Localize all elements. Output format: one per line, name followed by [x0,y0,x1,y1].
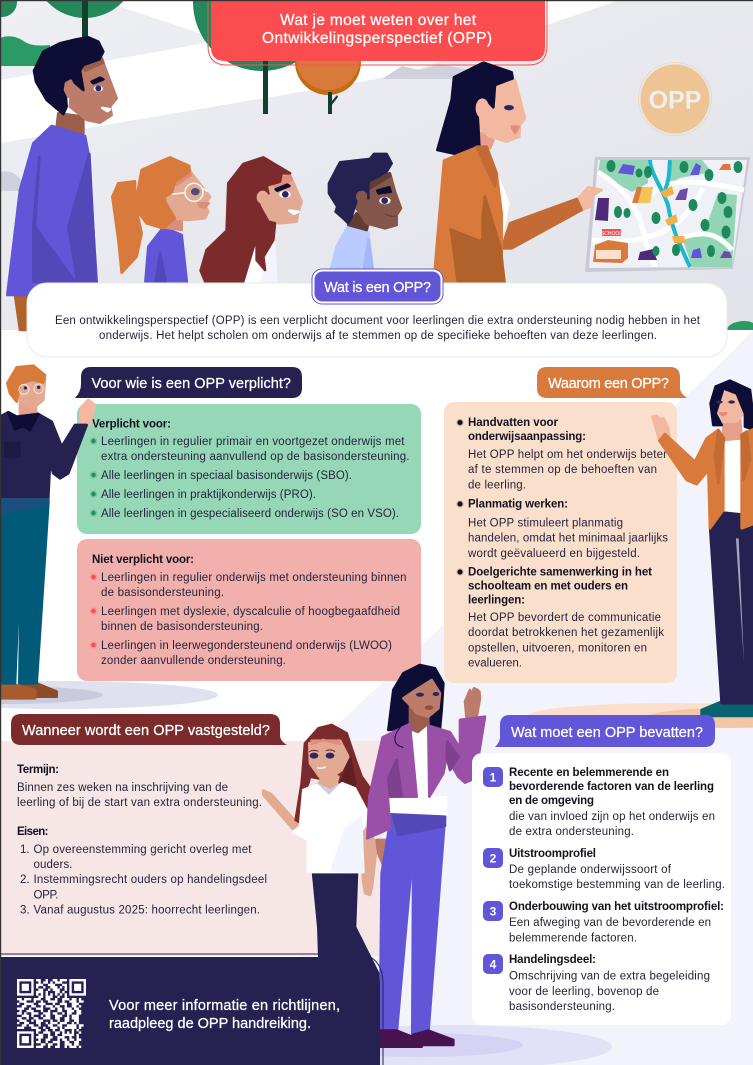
panel: Wanneer wordt een OPP vastgesteld: 2. [20,874,30,886]
panel: Wat is een OPP [27,283,727,357]
title banner: Wat je moet weten over het [280,12,477,29]
panel: Verplicht voor: Leerlingen in regulier primair en voortgezet onderwijs met [101,436,405,448]
panel: Wat is een OPP: Een ontwikkelingsperspectief (OPP) is een verplicht document voor leerlingen die extra ondersteuning nodig hebben in het [55,315,701,327]
panel: Waarom een OPP: af te stemmen op de behoeften van [468,464,657,476]
heading: Wat is een OPP [312,269,443,304]
panel: Waarom een OPP: Het OPP stimuleert planmatig [468,518,623,530]
panel: Waarom een OPP: evalueren. [468,658,522,670]
item 2 [483,848,725,891]
item 1: bevorderende factoren van de leerling [509,781,714,793]
item 1: die van invloed zijn op het onderwijs en [509,811,715,823]
panel: Niet verplicht voor: Leerlingen in regulier onderwijs met ondersteuning binnen [101,572,406,584]
item 1: de extra ondersteuning. [509,826,634,838]
tree: behind title [193,0,361,114]
background: lower section [0,330,753,1065]
illustration: man in purple shirt [7,37,117,330]
panel: Verplicht voor: extra ondersteuning aanvullend op de basisondersteuning. [101,451,410,463]
panel: Waarom een OPP: handelen, omdat het minimaal jaarlijks [468,532,668,544]
item 2: Uitstroomprofiel [509,848,596,860]
panel: Waarom een OPP: wordt geëvalueerd en bijgesteld. [467,548,640,560]
illustration: girl with long red hair [201,157,302,287]
panel: Wanneer wordt een OPP vastgesteld: Binnen zes weken na inschrijving van de [17,782,228,794]
panel: footer with QR code: raadpleeg de OPP handreiking. [109,1016,311,1032]
title banner: Ontwikkelingsperspectief (OPP) [262,30,492,47]
item 4: Omschrijving van de extra begeleiding [509,970,710,982]
item 1: Recente en belemmerende en [509,767,669,779]
panel: Waarom een OPP: Doelgerichte samenwerking in het [468,566,652,578]
panel: Verplicht voor [77,404,421,534]
shadow: right woman [528,703,753,729]
panel: Wanneer wordt een OPP vastgesteld: Op overeenstemming gericht overleg met [34,844,252,856]
item 4: Handelingsdeel: [509,954,596,966]
panel: footer with QR code [1,954,383,1065]
item 3: belemmerende factoren. [509,932,637,944]
panel: Verplicht voor: Alle leerlingen in speciaal basisonderwijs (SBO). [101,470,352,482]
panel: Niet verplicht voor: Leerlingen in leerwegondersteunend onderwijs (LWOO) [101,640,392,652]
panel: Wanneer wordt een OPP vastgesteld: 1. [20,844,30,856]
heading: Waarom een OPP [537,367,687,398]
item 2: De geplande onderwijssoort of [509,864,672,876]
item 4 [483,954,710,1013]
panel: Verplicht voor: Alle leerlingen in praktijkonderwijs (PRO). [101,489,316,501]
panel: Verplicht voor: Alle leerlingen in gespecialiseerd onderwijs (SO en VSO). [101,508,399,520]
illustration: girl with red hair [263,725,380,977]
panel: Wanneer wordt een OPP vastgesteld: ouders. [34,859,72,871]
panel: Wat moet een OPP bevatten [472,753,731,1025]
item 4: 4 [490,958,497,972]
item 1: en de omgeving [509,795,594,807]
panel: Niet verplicht voor: zonder aanvullende ondersteuning. [101,655,286,667]
heading: Wanneer wordt een OPP vastgesteld: Wanneer wordt een OPP vastgesteld? [22,723,270,739]
panel: Niet verplicht voor [77,539,421,681]
heading: Wat moet een OPP bevatten: Wat moet een OPP bevatten? [511,725,703,741]
item 1 [483,767,715,838]
panel: footer with QR code: Voor meer informatie en richtlijnen, [109,998,340,1014]
panel: Wanneer wordt een OPP vastgesteld [1,741,382,956]
item 4: voor de leerling, bovenop de [509,986,659,998]
item 2: 2 [490,852,497,866]
heading: Wanneer wordt een OPP vastgesteld [11,714,287,745]
illustration: woman pointing at map [433,63,602,287]
panel: Wanneer wordt een OPP vastgesteld: Instemmingsrecht ouders op handelingsdeel [34,874,267,886]
panel: Wanneer wordt een OPP vastgesteld: Vanaf augustus 2025: hoorrecht leerlingen. [34,904,260,916]
panel: Waarom een OPP: Planmatig werken: [468,498,568,510]
illustration: map board [585,157,750,272]
panel: Niet verplicht voor: Leerlingen met dyslexie, dyscalculie of hoogbegaafdheid [101,606,400,618]
panel: Waarom een OPP: schoolteam en met ouders en [468,580,628,592]
heading: Voor wie is een OPP verplicht [75,367,302,398]
item 2: toekomstige bestemming van de leerling. [509,879,725,891]
QR code [17,980,85,1047]
illustration: woman in purple jacket [288,665,612,1065]
panel: Wanneer wordt een OPP vastgesteld: leerling of bij de start van extra ondersteuning. [17,797,262,809]
heading: Waarom een OPP: Waarom een OPP? [548,376,669,392]
item 3 [483,901,724,944]
panel: Wanneer wordt een OPP vastgesteld: Eisen: [17,826,48,838]
heading: Voor wie is een OPP verplicht: Voor wie is een OPP verplicht? [92,376,291,392]
panel: Wanneer wordt een OPP vastgesteld: OPP. [34,890,58,902]
item 4: basisondersteuning. [509,1001,615,1013]
panel: Waarom een OPP: opstellen, uitvoeren, monitoren en [468,642,647,654]
illustration: map board: SCHOOL [601,231,622,237]
illustration: boy with dark hair [329,154,401,273]
heading: Wat is een OPP: Wat is een OPP? [324,280,431,296]
item 1: 1 [490,770,497,784]
panel: Waarom een OPP: Handvatten voor [468,417,559,429]
item 3: Onderbouwing van het uitstroomprofiel: [509,901,724,913]
title banner [208,0,547,65]
panel: Niet verplicht voor: Niet verplicht voor: [92,554,194,566]
background: top scene [0,0,753,330]
panel: Niet verplicht voor: de basisondersteuning. [101,587,224,599]
panel: Waarom een OPP: leerlingen: [468,594,525,606]
icon: OPP badge: OPP [649,86,701,114]
panel: Waarom een OPP: doordat betrokkenen het gezamenlijk [468,627,664,639]
panel: Verplicht voor: Verplicht voor: [92,418,171,430]
item 3: Een afweging van de bevorderende en [509,917,711,929]
shadow: left man [0,681,218,709]
illustration: girl with orange ponytail [112,157,210,287]
panel: Waarom een OPP: Het OPP bevordert de communicatie [468,612,661,624]
panel: Niet verplicht voor: binnen de basisondersteuning. [101,621,263,633]
panel: Wat is een OPP: onderwijs. Het helpt scholen om onderwijs af te stemmen op de specifieke behoeften van deze leerlingen. [99,330,657,342]
panel: Waarom een OPP: de leerling. [468,480,526,492]
heading: Wat moet een OPP bevatten [495,715,715,747]
illustration: man waving [0,366,95,698]
tree: top left [0,0,137,66]
illustration: woman waving right [652,381,753,716]
icon: OPP badge [638,62,712,136]
panel: Waarom een OPP: Het OPP helpt om het onderwijs beter [468,449,667,461]
panel: Waarom een OPP [444,402,677,683]
panel: Waarom een OPP: onderwijsaanpassing: [468,431,586,443]
panel: Wanneer wordt een OPP vastgesteld: 3. [20,904,30,916]
panel: Wanneer wordt een OPP vastgesteld: Termijn: [17,764,59,776]
item 3: 3 [490,904,497,918]
